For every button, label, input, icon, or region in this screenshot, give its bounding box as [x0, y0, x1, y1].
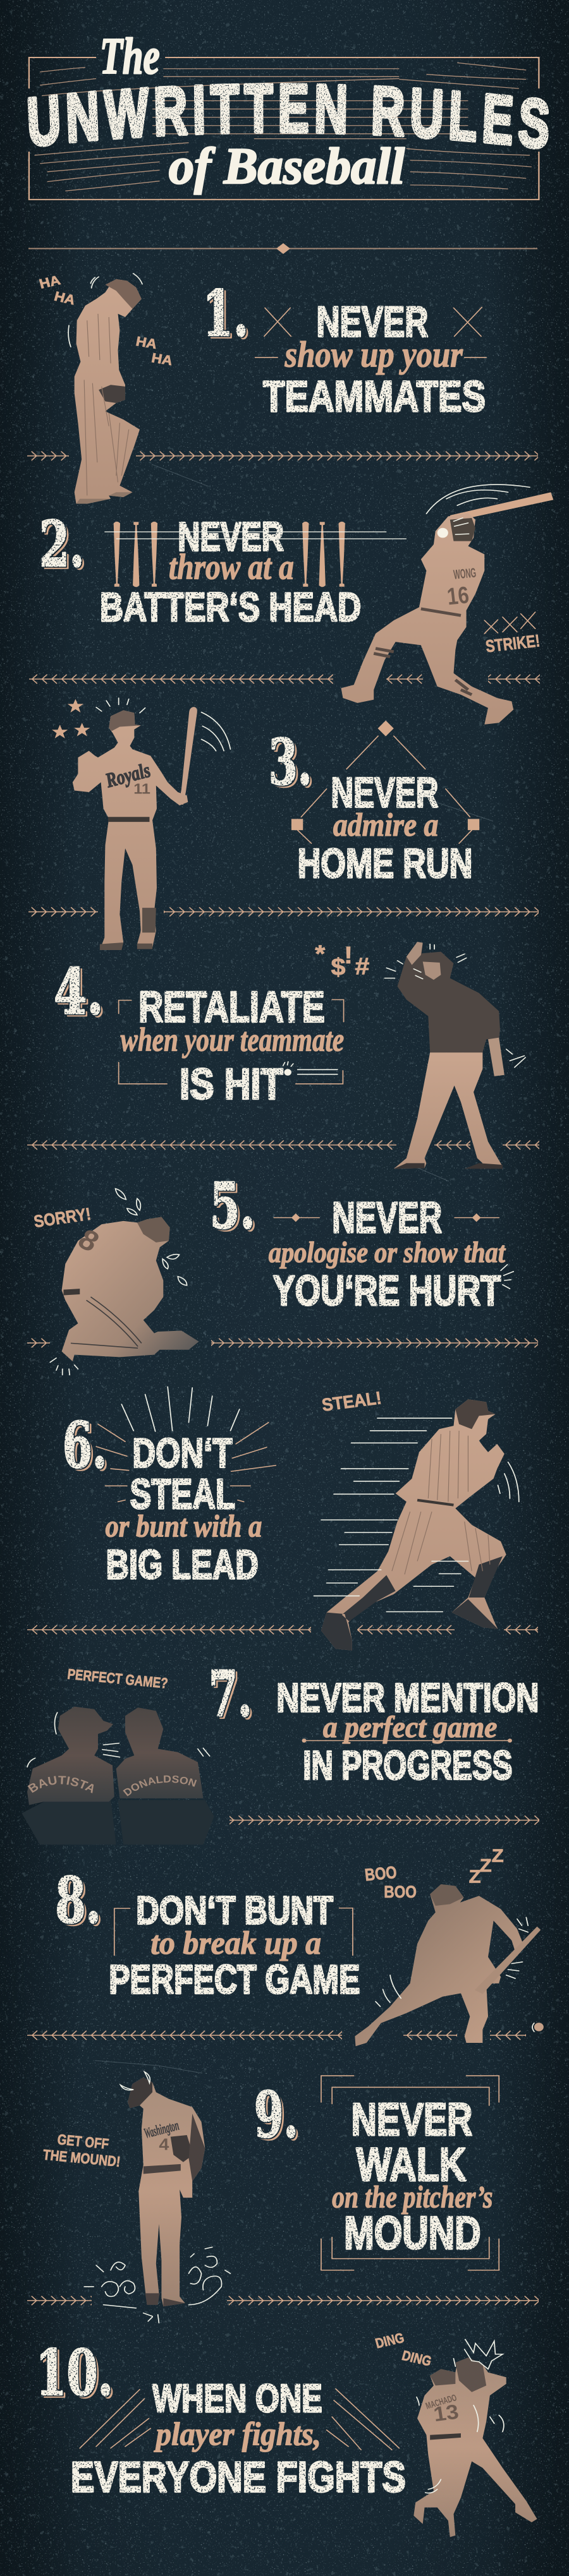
rule 1 player: [75, 279, 142, 504]
laughter labels: HA: [37, 272, 62, 291]
speed lines: [314, 1418, 519, 1612]
title block: [28, 28, 549, 200]
dirt swirls: [84, 2247, 230, 2323]
corner brackets: [119, 999, 344, 1084]
rule 1 heading: teammates: TEAMMATES: [263, 372, 486, 421]
title line: Unwritten Rules: UNWRITTEN RULES: [28, 83, 549, 149]
arrow row 6: [27, 1625, 538, 1635]
punch scribble: [465, 2339, 503, 2369]
rule 9 heading: never: NEVER: [352, 2094, 472, 2145]
panel: rule 10: [35, 2330, 537, 2537]
rule 3 script: admire a: [333, 806, 438, 843]
arrow row 8: [27, 2030, 526, 2040]
jersey name: MACHADO: [424, 2393, 458, 2411]
hurt rays: [501, 1265, 513, 1289]
double frame: [321, 2076, 499, 2270]
panel: rule 2: [39, 485, 553, 725]
rule 2 heading: never: NEVER: [178, 514, 284, 560]
rule 10 players: [413, 2357, 537, 2537]
laughter labels: HA: [135, 334, 158, 352]
bats right: [302, 522, 345, 587]
motion marks: [417, 2359, 504, 2493]
rule 4 script: when your teammate: [121, 1021, 344, 1059]
anger marks: [384, 944, 525, 1068]
arrow row 2: [29, 674, 540, 684]
panel: rule 5: [32, 1169, 513, 1375]
jersey number: 4: [159, 2135, 169, 2153]
arrow row 7: [229, 1815, 539, 1826]
swearing symbols: *$!#: [315, 941, 369, 980]
rule 5 heading: never: NEVER: [332, 1193, 442, 1242]
number 5: 5.: [210, 1169, 255, 1243]
divider with diamond: [28, 243, 537, 254]
rule 9 script: on the pitcher’s: [332, 2180, 493, 2215]
ding labels: DING: [374, 2330, 406, 2351]
ball: [532, 2023, 544, 2031]
baseball diamond: [291, 721, 479, 843]
laughter labels: HA: [52, 289, 77, 308]
burst rays side: [96, 1423, 276, 1502]
arrow row 4: [27, 1140, 539, 1150]
sleep Z labels: ZZZ: [469, 1846, 504, 1887]
rule 1 heading: never: NEVER: [317, 298, 428, 346]
rule 2 player: 16: [446, 582, 470, 610]
motion marks: [96, 698, 230, 751]
number 7: 7.: [209, 1657, 252, 1731]
crossed bats left: [264, 308, 291, 336]
rule 4 player: [394, 942, 505, 1169]
rule 6 heading: big lead: BIG LEAD: [106, 1541, 259, 1588]
rule 7 players: [21, 1707, 214, 1845]
jersey number: 11: [133, 781, 150, 797]
tears: [116, 1189, 187, 1285]
rule 6 player: [321, 1399, 506, 1651]
boo labels: BOO: [364, 1863, 398, 1885]
rule 8 heading: don't bunt: DON‘T BUNT: [136, 1889, 333, 1932]
jersey name left: BAUTISTA: [28, 1776, 94, 1793]
jersey script: Royals: [102, 759, 153, 792]
rule 9 heading: mound: MOUND: [344, 2207, 481, 2259]
title line: of Baseball: of Baseball: [169, 138, 405, 195]
number 1: 1.: [202, 276, 248, 351]
rule 3 heading: never: NEVER: [331, 769, 438, 816]
rule 10 script: player fights,: [154, 2416, 321, 2452]
get off label: GET OFF: [56, 2131, 109, 2153]
arrow row 3: [28, 907, 539, 917]
rule 3 player: [73, 707, 197, 950]
number 3: 3.: [269, 725, 312, 799]
engraved title lines: [35, 63, 532, 191]
stars: [52, 699, 90, 738]
diagonal hatch lines: [80, 2389, 399, 2450]
laughter labels: HA: [150, 350, 174, 368]
bats left: [114, 522, 157, 587]
rule 8 script: to break up a: [150, 1924, 321, 1961]
baseball: [437, 518, 469, 538]
boo labels: BOO: [384, 1882, 417, 1902]
rule 10 heading: when one: WHEN ONE: [152, 2376, 322, 2421]
get off label: [42, 2131, 121, 2170]
motion marks: head shake: [68, 274, 142, 347]
title line: The: The: [100, 28, 160, 85]
motion marks: [376, 1917, 528, 2006]
strike lines: [104, 532, 407, 539]
arrow row 1: [27, 451, 538, 461]
hit ball with speed lines: [283, 1062, 338, 1076]
rule 2 player: [341, 492, 553, 725]
sorry label: SORRY!: [32, 1205, 92, 1232]
diamond rule left: [274, 1213, 319, 1222]
rule 4 heading: is hit: IS HIT: [180, 1059, 283, 1109]
panel: rule 7: [21, 1657, 539, 1845]
rule 2 player: WONG: [453, 565, 477, 582]
panel: rule 3: [52, 698, 479, 950]
jersey name right: DONALDSON: [123, 1775, 197, 1797]
arrow row 9: [27, 2296, 539, 2306]
number 10: 10.: [35, 2336, 113, 2410]
rule 8 player: [355, 1884, 541, 2046]
number 9: 9.: [254, 2078, 298, 2152]
laughter labels: [37, 272, 174, 368]
rule 5 script: apologise or show that: [269, 1236, 506, 1269]
jersey number: 8: [72, 1223, 105, 1258]
panel: rule 4: [54, 941, 525, 1169]
rule 9 player: Washington: [142, 2117, 181, 2142]
corner brackets: [114, 1908, 353, 1955]
dashes beside script: [255, 356, 486, 358]
jersey number: 13: [432, 2400, 460, 2426]
arrow row 5: [27, 1338, 538, 1348]
number 2: 2.: [39, 507, 85, 581]
rule 4 heading: retaliate: RETALIATE: [138, 983, 325, 1032]
panel: rule 9: [42, 2072, 499, 2323]
rule 5 player: [62, 1217, 199, 1361]
rule 9 heading: walk: WALK: [357, 2138, 467, 2191]
rule 2 heading: batter's head: BATTER‘S HEAD: [100, 585, 361, 630]
steal label: STEAL!: [321, 1388, 383, 1416]
rule 2 script: throw at a: [169, 547, 294, 587]
strike label: STRIKE!: [484, 631, 541, 656]
rule 3 heading: home run: HOME RUN: [298, 840, 472, 886]
burst rays: [121, 1387, 240, 1431]
panel: rule 8: [55, 1846, 544, 2046]
rule 7 script: a perfect game: [323, 1710, 497, 1744]
title frame: [29, 57, 539, 200]
number 4: 4.: [54, 954, 104, 1028]
devil horns: [121, 2072, 150, 2090]
rule 10 heading: everyone fights: EVERYONE FIGHTS: [71, 2453, 406, 2501]
number 8: 8.: [55, 1863, 101, 1937]
rule 8 heading: perfect game: PERFECT GAME: [109, 1957, 360, 2002]
boo labels: [364, 1863, 417, 1902]
rule 9 player: [128, 2078, 205, 2306]
whisper marks: [27, 1712, 210, 1767]
number 6: 6.: [63, 1408, 107, 1482]
diamond rule right: [455, 1213, 499, 1222]
perfect game label: PERFECT GAME?: [66, 1666, 169, 1692]
rule 6 script: or bunt with a: [105, 1508, 262, 1544]
ding labels: [374, 2330, 433, 2369]
crossed bats right: [453, 307, 482, 336]
get off label: THE MOUND!: [42, 2147, 121, 2170]
rule 6 heading: steal: STEAL: [130, 1470, 235, 1517]
swing arcs: [426, 485, 530, 514]
rule 1 script: show up your: [284, 334, 463, 375]
rule 6 heading: don't: DON‘T: [133, 1429, 232, 1476]
strike marks: [484, 612, 535, 634]
panel: rule 6: [63, 1387, 519, 1651]
underline with dots: [302, 1738, 512, 1743]
impact marks: [50, 1358, 78, 1375]
panel: rule 1: [37, 272, 486, 504]
ding labels: DING: [400, 2347, 433, 2369]
